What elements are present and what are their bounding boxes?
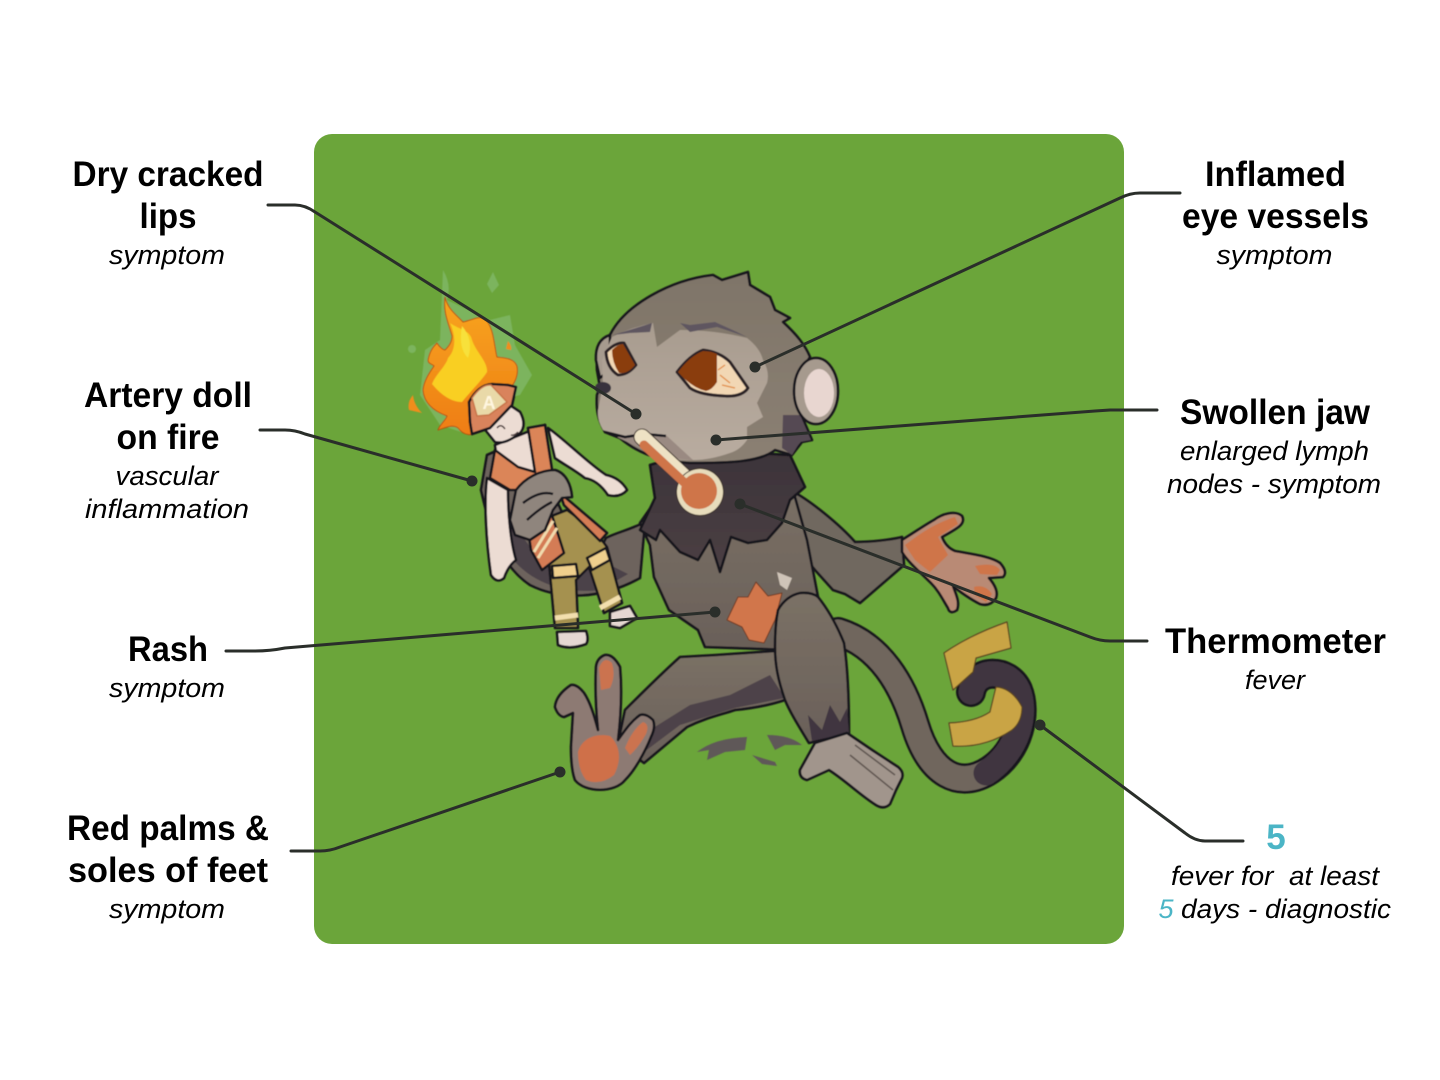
- label: five days of fever: [1158, 818, 1392, 924]
- pointer: five days: [1034, 720, 1243, 841]
- monkey hand gripping doll: [510, 470, 572, 540]
- doll head: [483, 402, 524, 443]
- green illustration panel: [314, 134, 1124, 944]
- monkey foot left with red sole: [555, 655, 654, 790]
- pointer: thermometer: [734, 498, 1147, 641]
- monkey right arm: [790, 490, 904, 603]
- label: rash: Rash: [128, 630, 208, 669]
- label: dry cracked lips: symptom: [109, 240, 225, 270]
- label: five days of fever: days - diagnostic: [1181, 894, 1392, 924]
- label: inflamed eye vessels: [1182, 155, 1369, 270]
- monkey ear left: [596, 335, 610, 378]
- label: dry cracked lips: [72, 155, 264, 270]
- number five made of gold blocks: [944, 622, 1022, 746]
- label: artery doll on fire: [84, 376, 252, 524]
- label: swollen jaw: enlarged lymph: [1180, 436, 1369, 466]
- label: rash: symptom: [109, 673, 225, 703]
- doll vest: [490, 425, 560, 490]
- pointer: dry cracked lips: [268, 205, 642, 420]
- thermometer in mouth: [642, 437, 724, 516]
- label: inflamed eye vessels: symptom: [1216, 240, 1332, 270]
- label: red palms and soles of feet: Red palms &: [67, 809, 269, 848]
- doll torso: [495, 425, 552, 490]
- label: five days of fever: 5: [1266, 818, 1286, 857]
- shed fur tufts: [697, 735, 802, 766]
- inner ear: [804, 369, 834, 417]
- label: red palms and soles of feet: symptom: [109, 894, 225, 924]
- doll helmet: [469, 384, 516, 434]
- eyebrows: [613, 322, 747, 337]
- label: artery doll on fire: inflammation: [85, 494, 249, 524]
- doll: burning firefighter: [408, 297, 637, 647]
- flame: [423, 297, 517, 435]
- monkey head: [597, 272, 812, 463]
- label: artery doll on fire: on fire: [116, 418, 220, 457]
- mouth line: [605, 432, 666, 437]
- label: rash: [109, 630, 225, 703]
- doll arm left: [486, 478, 516, 580]
- illustration: monkey holding burning doll: [408, 270, 1022, 807]
- pointer: artery doll: [260, 430, 478, 486]
- label: thermometer: Thermometer: [1165, 622, 1386, 661]
- label: inflamed eye vessels: eye vessels: [1182, 197, 1369, 236]
- doll trousers: [549, 510, 622, 628]
- helmet letter: A: [482, 393, 496, 413]
- doll boots: [557, 631, 588, 647]
- icon: fire halo: [408, 270, 532, 435]
- label: dry cracked lips: Dry cracked: [72, 155, 264, 194]
- doll arm right: [548, 428, 627, 496]
- pointer: red palms and soles: [291, 766, 566, 851]
- nose: [595, 382, 611, 394]
- label: swollen jaw: [1167, 393, 1381, 499]
- left eye: [606, 343, 636, 375]
- label: thermometer: fever: [1245, 665, 1306, 695]
- head side shadow: [782, 415, 811, 455]
- tail with curled tip: [838, 632, 1022, 779]
- monkey ear right: [794, 358, 838, 424]
- monkey leg left: [618, 650, 790, 763]
- monkey leg right: [775, 593, 849, 743]
- label: swollen jaw: nodes - symptom: [1167, 469, 1381, 499]
- right eye with inflamed vessels: [677, 350, 748, 396]
- pointer: rash: [226, 606, 720, 651]
- monkey torso: [640, 480, 818, 650]
- pointer: inflamed eye vessels: [750, 193, 1180, 372]
- label: red palms and soles of feet: soles of feet: [68, 851, 268, 890]
- label: artery doll on fire: Artery doll: [84, 376, 252, 415]
- label: thermometer: [1165, 622, 1386, 695]
- doll knee pads: [552, 564, 578, 578]
- label: dry cracked lips: lips: [140, 197, 196, 236]
- monkey neck fur: [640, 450, 805, 572]
- torn belly fur: [777, 572, 792, 590]
- monkey foot right: [800, 733, 902, 807]
- monkey face mask: [598, 323, 768, 460]
- label: red palms and soles of feet: [67, 809, 269, 924]
- doll coat tails: [527, 512, 564, 570]
- label: inflamed eye vessels: Inflamed: [1205, 155, 1346, 194]
- monkey right hand with rash: [902, 513, 1005, 612]
- rash patch on belly: [727, 582, 782, 643]
- label: artery doll on fire: vascular: [116, 461, 220, 491]
- label: five days of fever: 5: [1158, 894, 1174, 924]
- label: swollen jaw: Swollen jaw: [1180, 393, 1371, 432]
- monkey left arm holding doll: [481, 445, 645, 595]
- small flame sparks: [408, 341, 511, 413]
- pointer: swollen jaw: [710, 410, 1157, 446]
- label: five days of fever: fever for at least: [1171, 861, 1381, 891]
